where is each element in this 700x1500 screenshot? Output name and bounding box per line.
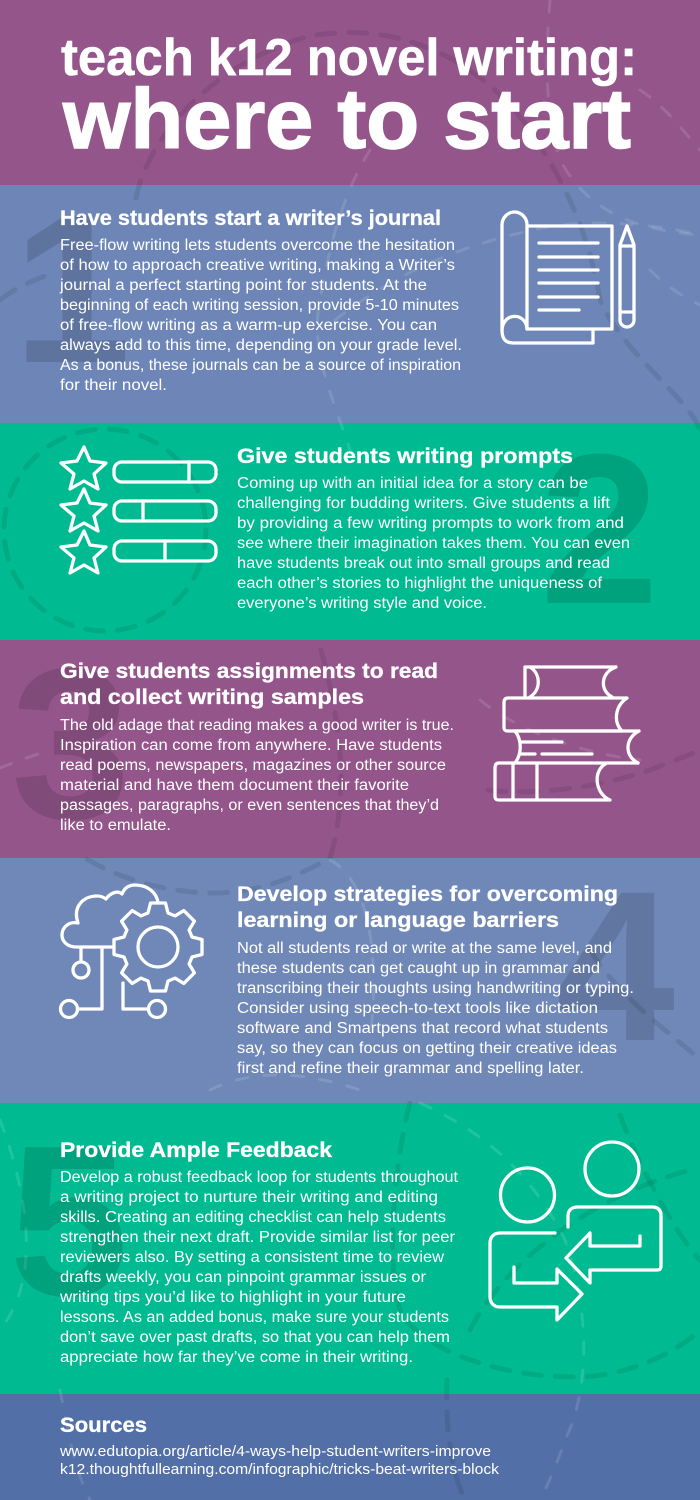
text block: journal: always add to this time, depending on your grade level. [60, 337, 462, 354]
text block: assignments: passages, paragraphs, or even sentences that they’d [60, 797, 439, 814]
text block: barriers: Not all students read or write at the same level, and [237, 940, 612, 957]
text block: journal: As a bonus, these journals can be a source of inspiration [60, 357, 461, 374]
text block: journal: of how to approach creative writing, making a Writer’s [60, 257, 455, 274]
heading: sources: Sources [60, 1414, 147, 1437]
text block: source links: www.edutopia.org/article/4-ways-help-student-writers-improve [59, 1443, 491, 1460]
heading: prompts: Give students writing prompts [237, 445, 573, 468]
text block: journal: journal a perfect starting point for students. At the [59, 277, 427, 294]
text block: barriers: say, so they can focus on getting their creative ideas [237, 1040, 617, 1057]
text block: feedback: don’t save over past drafts, so that you can help them [60, 1329, 450, 1346]
text block: barriers [237, 940, 634, 1077]
heading: feedback: Provide Ample Feedback [60, 1139, 332, 1162]
text block: journal: of free-flow writing as a warm-up exercise. You can [60, 317, 437, 334]
text block: feedback: reviewers also. By setting a consistent time to review [60, 1249, 445, 1266]
title: where to start [62, 72, 631, 166]
text block: source links: k12.thoughtfullearning.com/infographic/tricks-beat-writers-block [60, 1461, 500, 1478]
numeral 2: 2 [540, 410, 659, 649]
text block: journal: Free-flow writing lets students overcome the hesitation [60, 237, 455, 254]
icon: cloud and gear [60, 885, 202, 1018]
text block: barriers: first and refine their grammar and spelling later. [237, 1060, 584, 1077]
text block: feedback: lessons. As an added bonus, make sure your students [60, 1309, 449, 1326]
panel 4: learning barriers [60, 883, 634, 1077]
heading: assignments: and collect writing samples [60, 686, 364, 709]
text block: source links [59, 1443, 500, 1478]
text block: prompts: Coming up with an initial idea for a story can be [237, 475, 588, 492]
text block: feedback [59, 1169, 459, 1366]
text block: assignments: material and have them document their favorite [60, 777, 409, 794]
heading: barriers [237, 883, 618, 932]
panel: sources [59, 1414, 500, 1478]
text block: prompts: everyone’s writing style and voice. [237, 595, 487, 612]
text block: barriers: software and Smartpens that record what students [237, 1020, 608, 1037]
panel 3: reading assignments [60, 660, 639, 834]
numeral 3: 3 [11, 623, 131, 864]
icon: stars and bars [61, 447, 216, 573]
icon: two people exchanging feedback [490, 1142, 661, 1320]
panel 1: writer's journal [59, 207, 634, 394]
text block: prompts: by providing a few writing prompts to work from and [237, 515, 624, 532]
text block: prompts: each other’s stories to highlight the uniqueness of [237, 575, 603, 592]
text block: prompts: challenging for budding writers. Give students a lift [237, 495, 611, 512]
numeral 1: 1 [13, 170, 131, 407]
title: teach k12 novel writing: [61, 29, 637, 87]
text block: assignments: Inspiration can come from anywhere. Have students [60, 737, 442, 754]
text block: feedback: a writing project to nurture their writing and editing [60, 1189, 438, 1206]
text block: feedback: drafts weekly, you can pinpoint grammar issues or [60, 1269, 426, 1286]
text block: barriers: these students can get caught up in grammar and [237, 960, 600, 977]
icon: stack of books [495, 667, 639, 800]
numeral 5: 5 [9, 1100, 129, 1341]
text block: journal [59, 237, 462, 394]
text block: feedback: writing tips you’d like to highlight in your future [59, 1289, 406, 1306]
text block: journal: for their novel. [60, 377, 167, 394]
text block: barriers: transcribing their thoughts using handwriting or typing. [237, 980, 634, 997]
text block: feedback: appreciate how far they’ve come in their writing. [60, 1349, 413, 1366]
text block: assignments: The old adage that reading makes a good writer is true. [60, 717, 454, 734]
text block: assignments [60, 717, 454, 834]
heading: journal: Have students start a writer’s journal [60, 207, 441, 230]
text block: assignments: read poems, newspapers, magazines or other source [60, 757, 446, 774]
heading: barriers: Develop strategies for overcoming [237, 883, 618, 906]
panel 5: feedback [59, 1139, 661, 1366]
text block: feedback: Develop a robust feedback loop for students throughout [60, 1169, 459, 1186]
text block: prompts: have students break out into small groups and read [237, 555, 610, 572]
heading: assignments: Give students assignments to read [60, 660, 438, 683]
text block: feedback: strengthen their next draft. Provide similar list for peer [60, 1229, 455, 1246]
heading: barriers: learning or language barriers [237, 909, 559, 932]
text block: prompts: see where their imagination takes them. You can even [237, 535, 630, 552]
title [61, 29, 637, 166]
heading: assignments [60, 660, 438, 709]
text block: assignments: like to emulate. [60, 817, 171, 834]
numeral 4: 4 [556, 847, 675, 1086]
panel 2: writing prompts [61, 445, 630, 612]
icon: journal and pencil [502, 212, 634, 343]
text block: barriers: Consider using speech-to-text tools like dictation [237, 1000, 598, 1017]
text block: feedback: skills. Creating an editing checklist can help students [60, 1209, 446, 1226]
text block: journal: beginning of each writing session, provide 5-10 minutes [60, 297, 459, 314]
text block: prompts [237, 475, 630, 612]
